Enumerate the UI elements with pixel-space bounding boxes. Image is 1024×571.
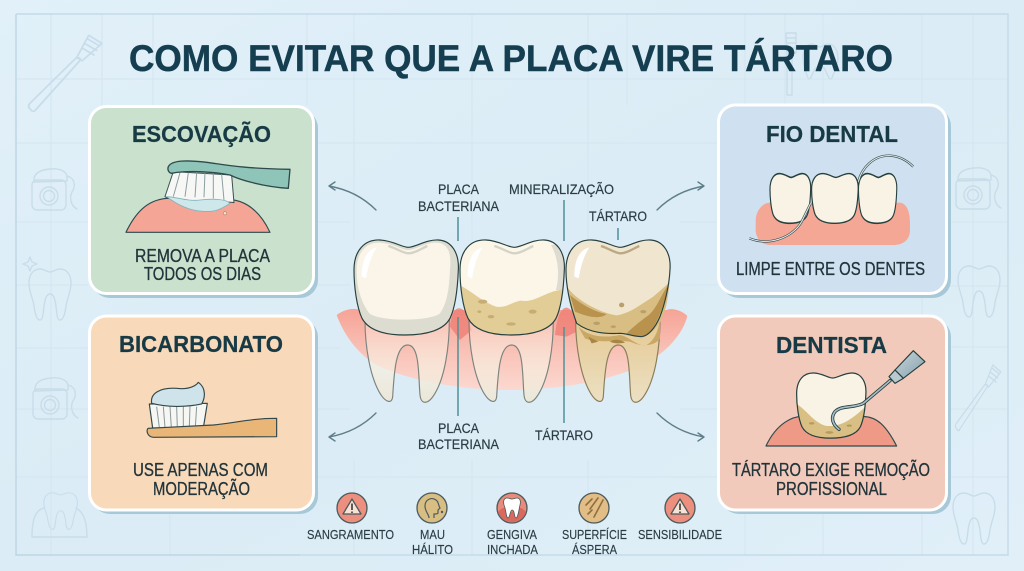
heading: fio dental: FIO DENTAL xyxy=(766,121,898,147)
heading: bicarbonato: BICARBONATO xyxy=(119,331,283,357)
arrow: to dentista xyxy=(657,413,704,441)
symptom: mau hálito xyxy=(412,493,453,557)
arrow: to escovação xyxy=(329,182,376,210)
symptom: superfície áspera xyxy=(562,493,627,557)
symptom: gengiva inchada xyxy=(487,493,539,557)
label: placa bacteriana bottom xyxy=(418,420,500,452)
label: placa bacteriana top: BACTERIANA xyxy=(418,198,500,214)
icon: toothbrush right xyxy=(955,365,1001,430)
symptom: superfície áspera: SUPERFÍCIE xyxy=(562,527,627,542)
icon: floss box left lower xyxy=(33,378,78,419)
symptom: superfície áspera: ÁSPERA xyxy=(572,542,618,557)
tooth 2 with plaque xyxy=(459,240,566,343)
icon: toothbrush top left xyxy=(29,35,102,111)
icon: tooth in gum xyxy=(32,493,87,537)
symptom: mau hálito: HÁLITO xyxy=(412,542,453,557)
icon: floss box right xyxy=(956,168,1001,209)
icon: scaler on tooth xyxy=(766,351,925,446)
text: remova a placa xyxy=(135,246,270,284)
gum xyxy=(337,309,687,390)
heading: dentista: DENTISTA xyxy=(776,332,887,358)
symptom: gengiva inchada: GENGIVA xyxy=(487,528,538,542)
arrow: to bicarbonato xyxy=(329,413,376,441)
icon: floss between teeth xyxy=(749,156,913,245)
text: tártaro exige remoção profissional xyxy=(732,459,930,499)
icon: toothbrush with paste xyxy=(147,382,277,437)
icon: tooth top right xyxy=(803,44,838,79)
text: use apenas com moderação: USE APENAS COM xyxy=(133,460,268,480)
icon: toothbrush top right xyxy=(786,33,796,95)
icon: tooth with sparkle left xyxy=(23,257,71,320)
text: remova a placa: TODOS OS DIAS xyxy=(144,264,261,284)
tooth 1 healthy xyxy=(354,240,458,335)
label: tártaro bottom: TÁRTARO xyxy=(535,427,593,443)
heading: escovação: ESCOVAÇÃO xyxy=(132,120,271,147)
label: placa bacteriana top xyxy=(418,181,500,214)
tooth 3 with tartar xyxy=(566,240,670,345)
symptom: sangramento: SANGRAMENTO xyxy=(307,528,394,542)
icon: floss box left upper xyxy=(32,169,77,210)
label: placa bacteriana bottom: PLACA xyxy=(438,420,480,436)
icon: tooth bottom right xyxy=(953,493,995,544)
icon: toothbrush on gum xyxy=(126,161,290,232)
icon: tooth right xyxy=(958,266,1000,317)
text: use apenas com moderação: MODERAÇÃO xyxy=(153,478,250,499)
text: remova a placa: REMOVA A PLACA xyxy=(135,246,270,266)
panel: escovação xyxy=(90,106,318,298)
panel: dentista xyxy=(718,316,951,514)
callout lines xyxy=(458,200,618,423)
symptom: sangramento xyxy=(307,493,394,542)
diagram: teeth and gum xyxy=(337,240,687,402)
text: limpe entre os dentes: LIMPE ENTRE OS DENTES xyxy=(736,259,925,279)
title: COMO EVITAR QUE A PLACA VIRE TÁRTARO xyxy=(129,38,893,79)
panel: bicarbonato xyxy=(90,316,318,514)
symptom: mau hálito: MAU xyxy=(420,528,445,542)
symptom: sensibilidade: SENSIBILIDADE xyxy=(638,528,722,542)
gum papillae xyxy=(450,308,580,340)
label: placa bacteriana bottom: BACTERIANA xyxy=(418,436,500,452)
label: placa bacteriana top: PLACA xyxy=(438,181,480,197)
arrow: to fio dental xyxy=(657,182,704,210)
panel: fio dental xyxy=(718,105,951,298)
roots xyxy=(365,320,660,402)
label: mineralização: MINERALIZAÇÃO xyxy=(509,181,614,197)
label: tártaro top: TÁRTARO xyxy=(589,208,647,224)
text: tártaro exige remoção profissional: PROFISSIONAL xyxy=(776,479,887,499)
symptom: gengiva inchada: INCHADA xyxy=(487,543,539,557)
text: use apenas com moderação xyxy=(133,460,268,499)
text: tártaro exige remoção profissional: TÁRTARO EXIGE REMOÇÃO xyxy=(732,459,930,480)
symptom: sensibilidade xyxy=(638,493,722,542)
